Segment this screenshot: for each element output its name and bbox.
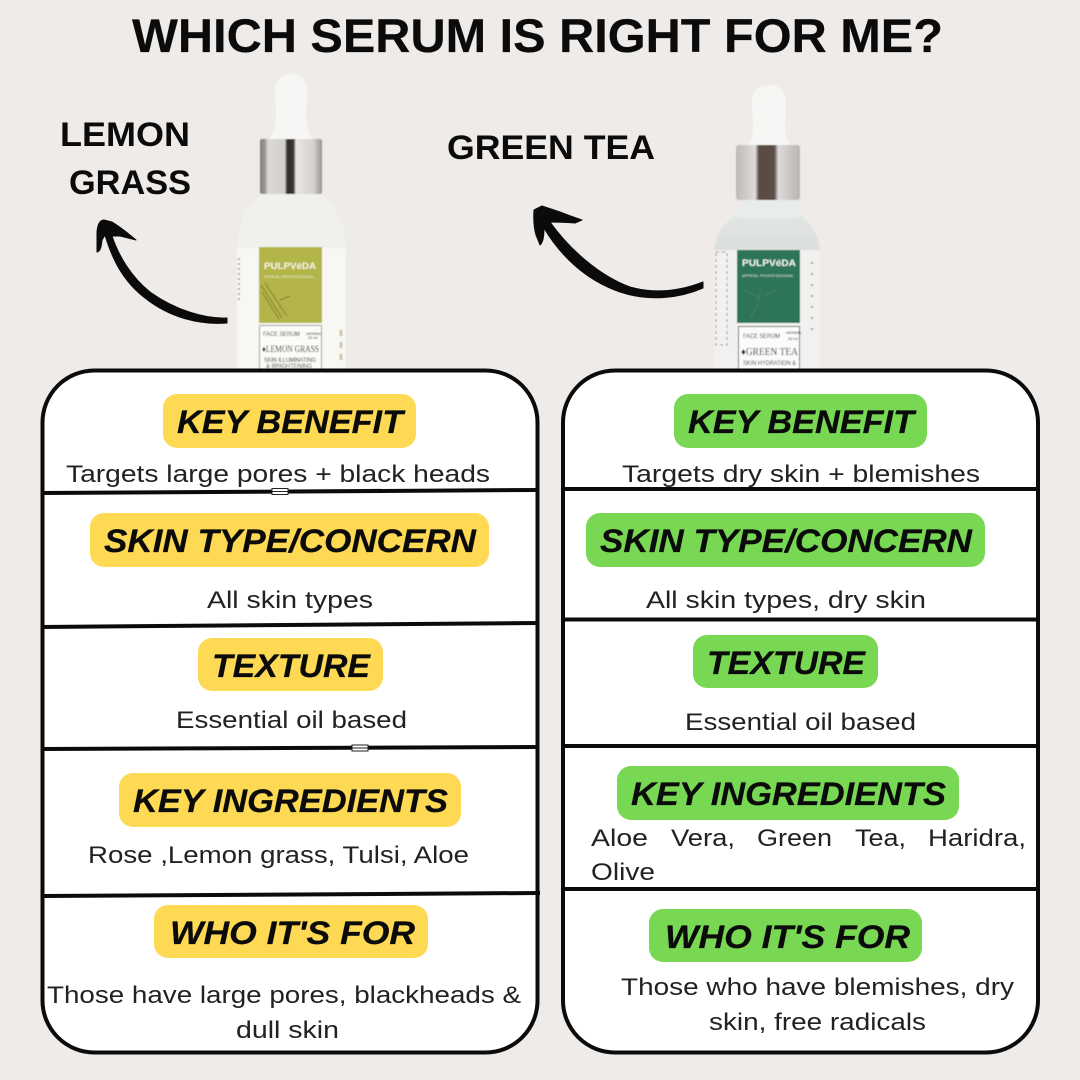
panel: lemon grass [41,370,540,1052]
row: texture [176,638,407,734]
product name box: SKIN HYDRATION & [743,361,796,367]
row: skin type [90,513,489,614]
row: texture [685,635,916,736]
product name box: FACE SERUM [263,331,300,338]
row: who it's for [47,905,521,1044]
row: texture: Essential oil based [685,709,916,736]
arrow: green tea [534,206,703,298]
row: who it's for: WHO IT'S FOR [170,915,415,951]
row: key benefit [622,394,980,488]
label: lemon grass [60,116,191,202]
row: key benefit: KEY BENEFIT [688,404,917,440]
row: who it's for [621,909,1015,1036]
row: skin type: All skin types [207,587,373,614]
product name box: & BRIGHTENING [266,364,312,370]
product name box: SKIN ILLUMINATING [264,358,316,364]
arrow: lemon grass [97,220,227,323]
olive label: PULPVéDA [264,261,317,271]
product name box [738,326,803,372]
product name box: ♦LEMON GRASS [262,344,319,354]
label: green tea: GREEN TEA [447,129,655,167]
row: key benefit: Targets dry skin + blemishes [622,461,980,488]
product name box: HERBAL [786,330,803,335]
green label: APPEAL PROFESSIONAL [742,273,795,278]
panel: green tea [563,370,1038,1052]
product name box [260,326,323,372]
row: skin type [586,513,985,614]
product name box: 30 ml [788,336,798,341]
product name box: HERBAL [306,331,323,336]
row: who it's for: WHO IT'S FOR [665,919,910,955]
row: key ingredients [88,773,469,869]
row: key ingredients: Green [757,825,832,852]
title: WHICH SERUM IS RIGHT FOR ME? [132,9,943,62]
green label: PULPVéDA [742,258,797,268]
product name box: FACE SERUM [743,333,780,340]
row: who it's for: dull skin [236,1017,339,1044]
row: key ingredients: Tea, [855,825,906,852]
product name box: 30 ml [308,335,318,340]
olive label [259,247,322,323]
product name box: ♦GREEN TEA [741,347,799,358]
icon: green tea bottle [714,85,820,372]
row: key ingredients: Aloe [591,825,648,852]
row: key ingredients: KEY INGREDIENTS [133,783,449,819]
row: skin type: SKIN TYPE/CONCERN [104,523,477,559]
green label [737,250,800,323]
row: who it's for: Those have large pores, blackheads & [47,982,521,1009]
row: key ingredients: Olive [591,859,655,886]
label: lemon grass: GRASS [69,164,191,202]
row: key benefit: KEY BENEFIT [177,404,406,440]
row: who it's for: Those who have blemishes, dry [621,974,1015,1001]
olive label: APPEAL PROFESSIONAL [264,274,315,279]
row: key ingredients: Haridra, [928,825,1026,852]
label: lemon grass: LEMON [60,116,190,154]
row: key ingredients: KEY INGREDIENTS [631,776,947,812]
row: texture: TEXTURE [212,648,372,684]
row: texture: TEXTURE [707,645,867,681]
row: key benefit: Targets large pores + black heads [66,461,490,488]
row: skin type: All skin types, dry skin [646,587,926,614]
row: who it's for: skin, free radicals [709,1009,926,1036]
row: key ingredients: Vera, [671,825,735,852]
row: texture: Essential oil based [176,707,407,734]
row: key ingredients: Rose ,Lemon grass, Tulsi, Aloe [88,842,469,869]
row: key benefit [66,394,490,488]
row: skin type: SKIN TYPE/CONCERN [600,523,973,559]
icon: lemon grass bottle [237,74,346,372]
row: key ingredients [591,766,1026,886]
